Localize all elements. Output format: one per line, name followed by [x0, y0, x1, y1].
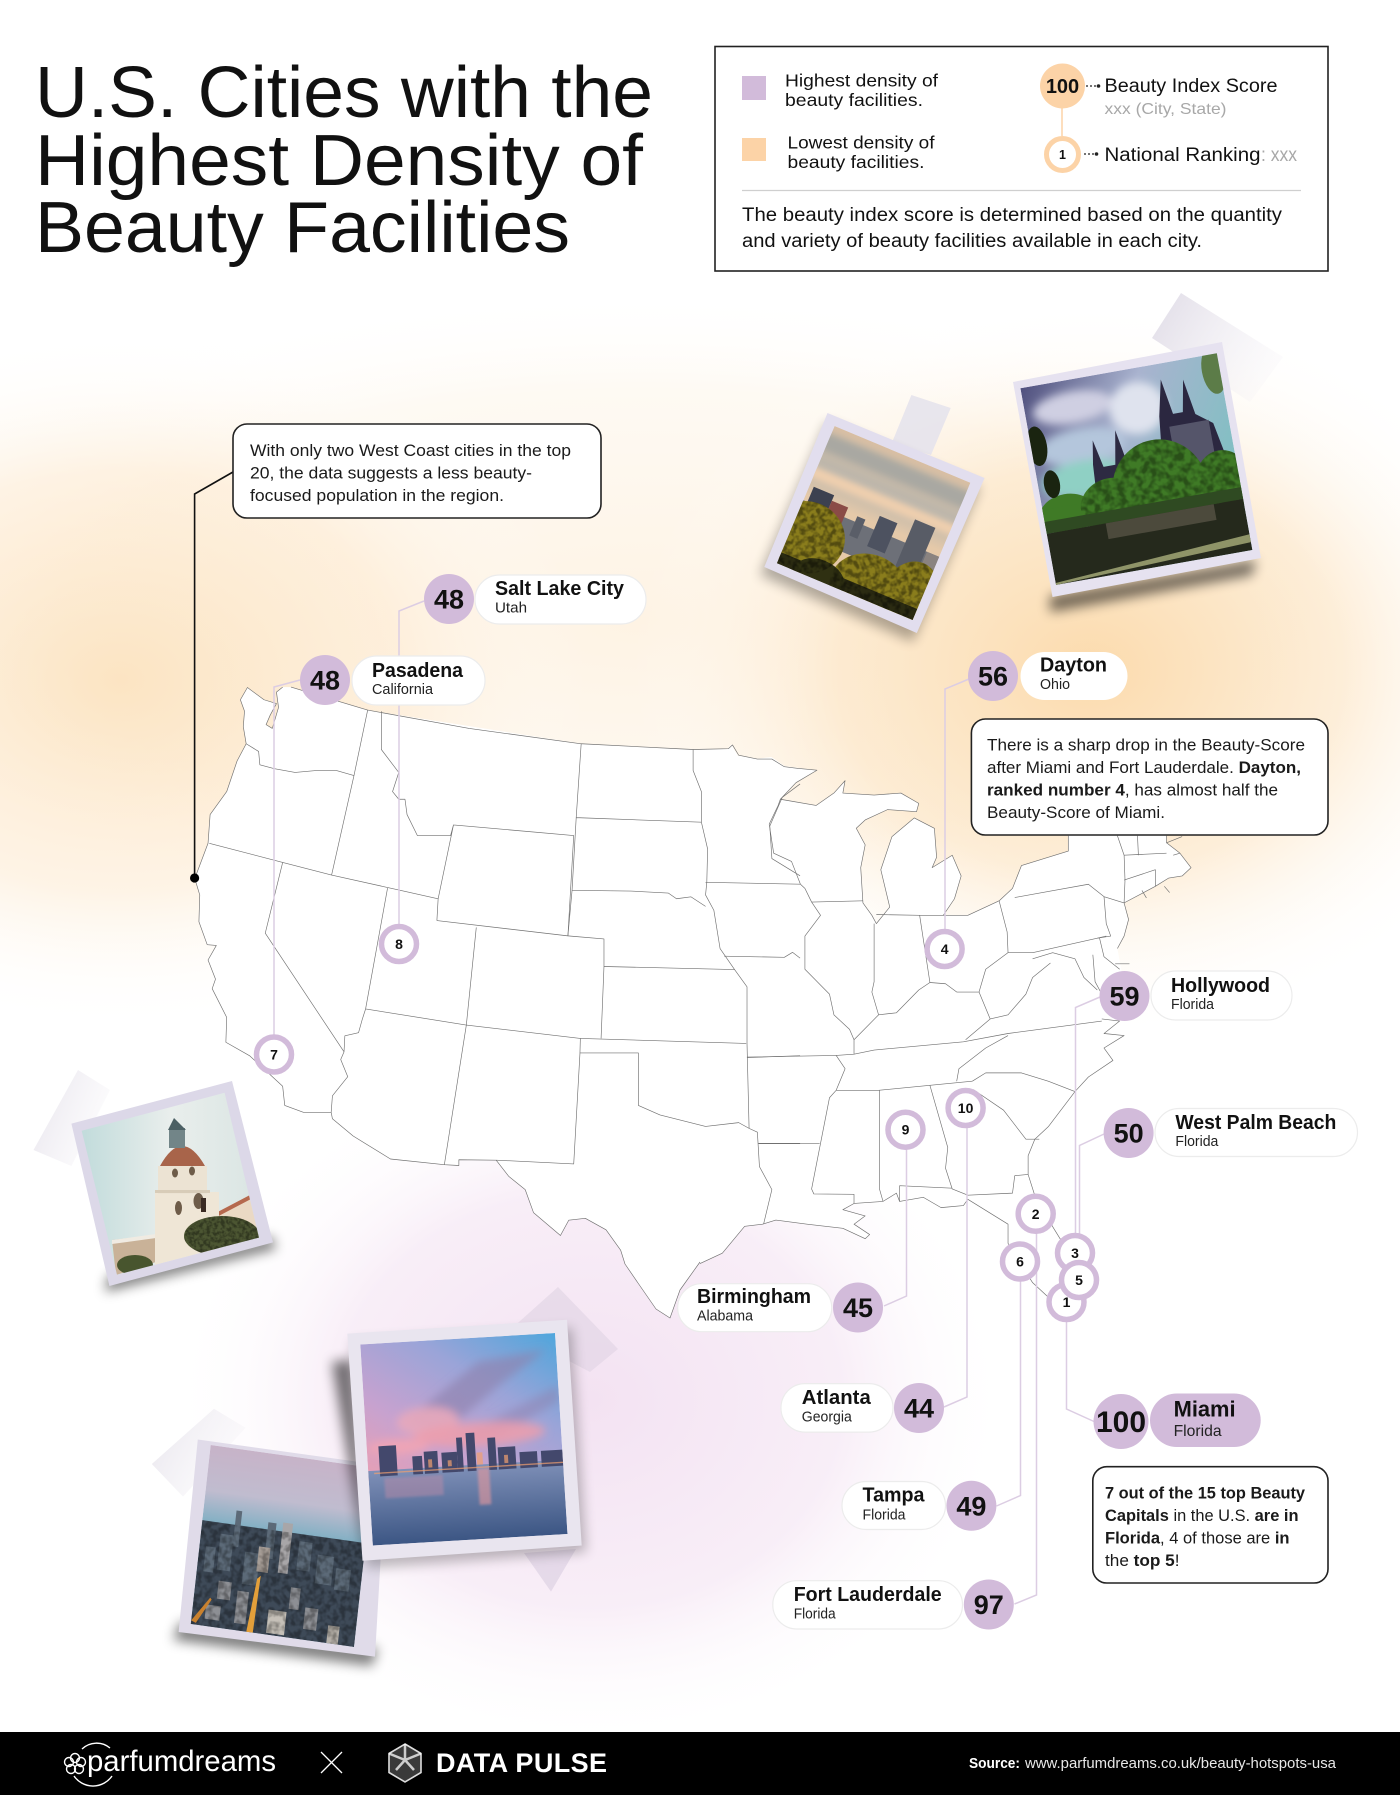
western state borders — [195, 687, 800, 1250]
label: Pasadena — [300, 655, 485, 705]
label: Dayton: 56 — [978, 662, 1008, 692]
label: Miami — [1094, 1394, 1261, 1449]
label: Pasadena: Pasadena — [372, 660, 464, 682]
label: West Palm Beach: West Palm Beach — [1175, 1112, 1336, 1134]
label: Salt Lake City — [424, 574, 646, 624]
callout: Dayton — [971, 719, 1328, 835]
label: Hollywood — [1100, 971, 1292, 1021]
logo: parfumdreams — [64, 1743, 276, 1786]
callout: Dayton: There is a sharp drop in the Beauty-Score — [987, 736, 1305, 754]
title: U.S. Cities with the — [35, 53, 653, 133]
label: Hollywood: Florida — [1171, 997, 1215, 1013]
legend: score and ranking key: National Ranking — [1104, 145, 1260, 166]
map of the United States — [195, 687, 1191, 1318]
rank marker 7 — [256, 1037, 292, 1072]
logo: parfumdreams: parfumdreams — [87, 1745, 276, 1778]
rank marker 8 — [382, 926, 416, 962]
label: Dayton: Ohio — [1040, 677, 1070, 693]
photo: Salt Lake temple — [1013, 293, 1283, 612]
legend: highest density text: beauty facilities. — [785, 90, 923, 110]
label: Miami: Florida — [1174, 1423, 1222, 1440]
rank marker 8: 8 — [395, 936, 403, 952]
rank marker 10: 10 — [958, 1100, 974, 1116]
leader lines from city labels to rank markers — [274, 601, 1104, 1604]
label: Dayton: Dayton — [1040, 654, 1107, 676]
rank marker 9: 9 — [902, 1122, 910, 1138]
label: Pasadena: California — [372, 682, 434, 698]
label: Tampa — [842, 1481, 996, 1531]
legend: score and ranking key: : xxx — [1261, 145, 1297, 166]
background glow: cream band — [0, 290, 1400, 950]
legend: score and ranking key — [1040, 64, 1297, 170]
rank marker 7: 7 — [270, 1046, 278, 1062]
eastern state borders — [700, 769, 1191, 1313]
photo: Pasadena city hall — [34, 1070, 276, 1292]
rank marker 5: 5 — [1075, 1272, 1083, 1288]
title — [35, 53, 653, 268]
legend: lowest density swatch — [742, 138, 766, 161]
callout: West Coast — [190, 424, 601, 883]
logo: Data Pulse: DATA PULSE — [436, 1748, 607, 1778]
legend: score and ranking key: xxx (City, State) — [1104, 101, 1226, 118]
legend: explanation text — [742, 205, 1283, 252]
label: Miami: 100 — [1096, 1406, 1146, 1439]
label: Dayton — [968, 651, 1128, 701]
label: Tampa: 49 — [956, 1491, 986, 1521]
legend: highest density swatch — [742, 76, 766, 100]
rank marker 6 — [1002, 1244, 1038, 1279]
label: Birmingham — [678, 1282, 883, 1332]
label: Fort Lauderdale: Fort Lauderdale — [794, 1584, 942, 1606]
rank marker 2 — [1018, 1196, 1053, 1231]
label: Atlanta — [781, 1383, 944, 1433]
label: Birmingham: Birmingham — [697, 1286, 811, 1308]
south Texas coast — [621, 1250, 700, 1318]
rank marker 3: 3 — [1071, 1245, 1079, 1261]
legend: lowest density text: Lowest density of — [788, 132, 935, 152]
legend: score and ranking key: 100 — [1046, 76, 1079, 98]
label: Fort Lauderdale: 97 — [974, 1590, 1004, 1620]
legend: lowest density text: beauty facilities. — [788, 152, 924, 172]
label: West Palm Beach — [1104, 1108, 1358, 1158]
label: Atlanta: 44 — [904, 1394, 934, 1424]
legend: lowest density text — [788, 132, 935, 172]
background glow: orange left — [0, 330, 590, 1030]
land fill — [195, 687, 1191, 1318]
callout: Florida — [1093, 1467, 1328, 1583]
label: Pasadena: 48 — [310, 666, 340, 696]
rank marker 5 — [1062, 1262, 1096, 1298]
rank marker 1 — [1049, 1284, 1084, 1320]
rank marker 9 — [888, 1112, 923, 1147]
callout: West Coast: With only two West Coast cities in the top — [250, 441, 571, 460]
icon: cross separator — [321, 1752, 342, 1773]
legend: highest density text — [785, 70, 938, 110]
panel: legend — [715, 46, 1328, 271]
background glow: orange right — [630, 300, 1400, 1040]
rank marker 2: 2 — [1032, 1206, 1040, 1222]
background glow: pink — [170, 1055, 1010, 1745]
rank marker 4: 4 — [941, 941, 949, 957]
source: Source: — [969, 1755, 1020, 1772]
title: Beauty Facilities — [35, 188, 570, 268]
rank marker 6: 6 — [1016, 1254, 1024, 1270]
callout: West Coast: focused population in the region. — [250, 486, 504, 505]
label: West Palm Beach: 50 — [1114, 1118, 1144, 1148]
callout: Dayton: ranked number 4, has almost half the — [987, 780, 1278, 800]
label: Tampa: Tampa — [862, 1485, 925, 1507]
rank marker 3 — [1058, 1236, 1092, 1270]
callout: Florida: 7 out of the 15 top Beauty — [1105, 1484, 1306, 1502]
legend: explanation text: and variety of beauty facilities available in each city. — [742, 231, 1202, 252]
legend: explanation text: The beauty index score is determined based on the quantity — [742, 205, 1283, 226]
label: Salt Lake City: Salt Lake City — [495, 578, 625, 600]
callout: Dayton: after Miami and Fort Lauderdale. Dayton, — [987, 758, 1301, 777]
rank marker 10 — [948, 1090, 983, 1126]
footer bar — [0, 1732, 1400, 1795]
source: www.parfumdreams.co.uk/beauty-hotspots-usa — [1024, 1755, 1337, 1772]
legend: highest density text: Highest density of — [785, 70, 938, 90]
callout: West Coast: 20, the data suggests a less beauty- — [250, 464, 532, 482]
photo: Atlanta city aerial — [152, 1409, 386, 1666]
label: Birmingham: 45 — [843, 1293, 873, 1323]
label: West Palm Beach: Florida — [1175, 1134, 1219, 1150]
logo: Data Pulse — [389, 1744, 607, 1782]
label: Salt Lake City: Utah — [495, 600, 527, 616]
title: Highest Density of — [35, 121, 644, 201]
legend: score and ranking key: Beauty Index Score — [1104, 76, 1278, 97]
label: Fort Lauderdale: Florida — [794, 1606, 837, 1622]
label: Miami: Miami — [1174, 1396, 1236, 1422]
label: Atlanta: Georgia — [802, 1410, 853, 1426]
photo: Miami skyline at sunset — [332, 1287, 618, 1592]
label: Hollywood: 59 — [1109, 982, 1140, 1012]
legend: score and ranking key: 1 — [1059, 148, 1066, 162]
label: Atlanta: Atlanta — [802, 1387, 872, 1409]
rank marker 4 — [927, 932, 962, 966]
label: Salt Lake City: 48 — [434, 584, 464, 614]
rank marker 1: 1 — [1063, 1294, 1071, 1310]
photo: Dayton skyline with yellow trees — [749, 395, 987, 647]
callout: Florida: the top 5! — [1105, 1551, 1180, 1570]
callout: Florida: Florida, 4 of those are in — [1105, 1528, 1290, 1548]
callout: Florida: Capitals in the U.S. are in — [1105, 1506, 1298, 1525]
label: Hollywood: Hollywood — [1171, 975, 1270, 997]
label: Tampa: Florida — [862, 1507, 906, 1523]
callout: Dayton: Beauty-Score of Miami. — [987, 803, 1165, 822]
label: Birmingham: Alabama — [697, 1309, 754, 1325]
label: Fort Lauderdale — [773, 1580, 1014, 1630]
